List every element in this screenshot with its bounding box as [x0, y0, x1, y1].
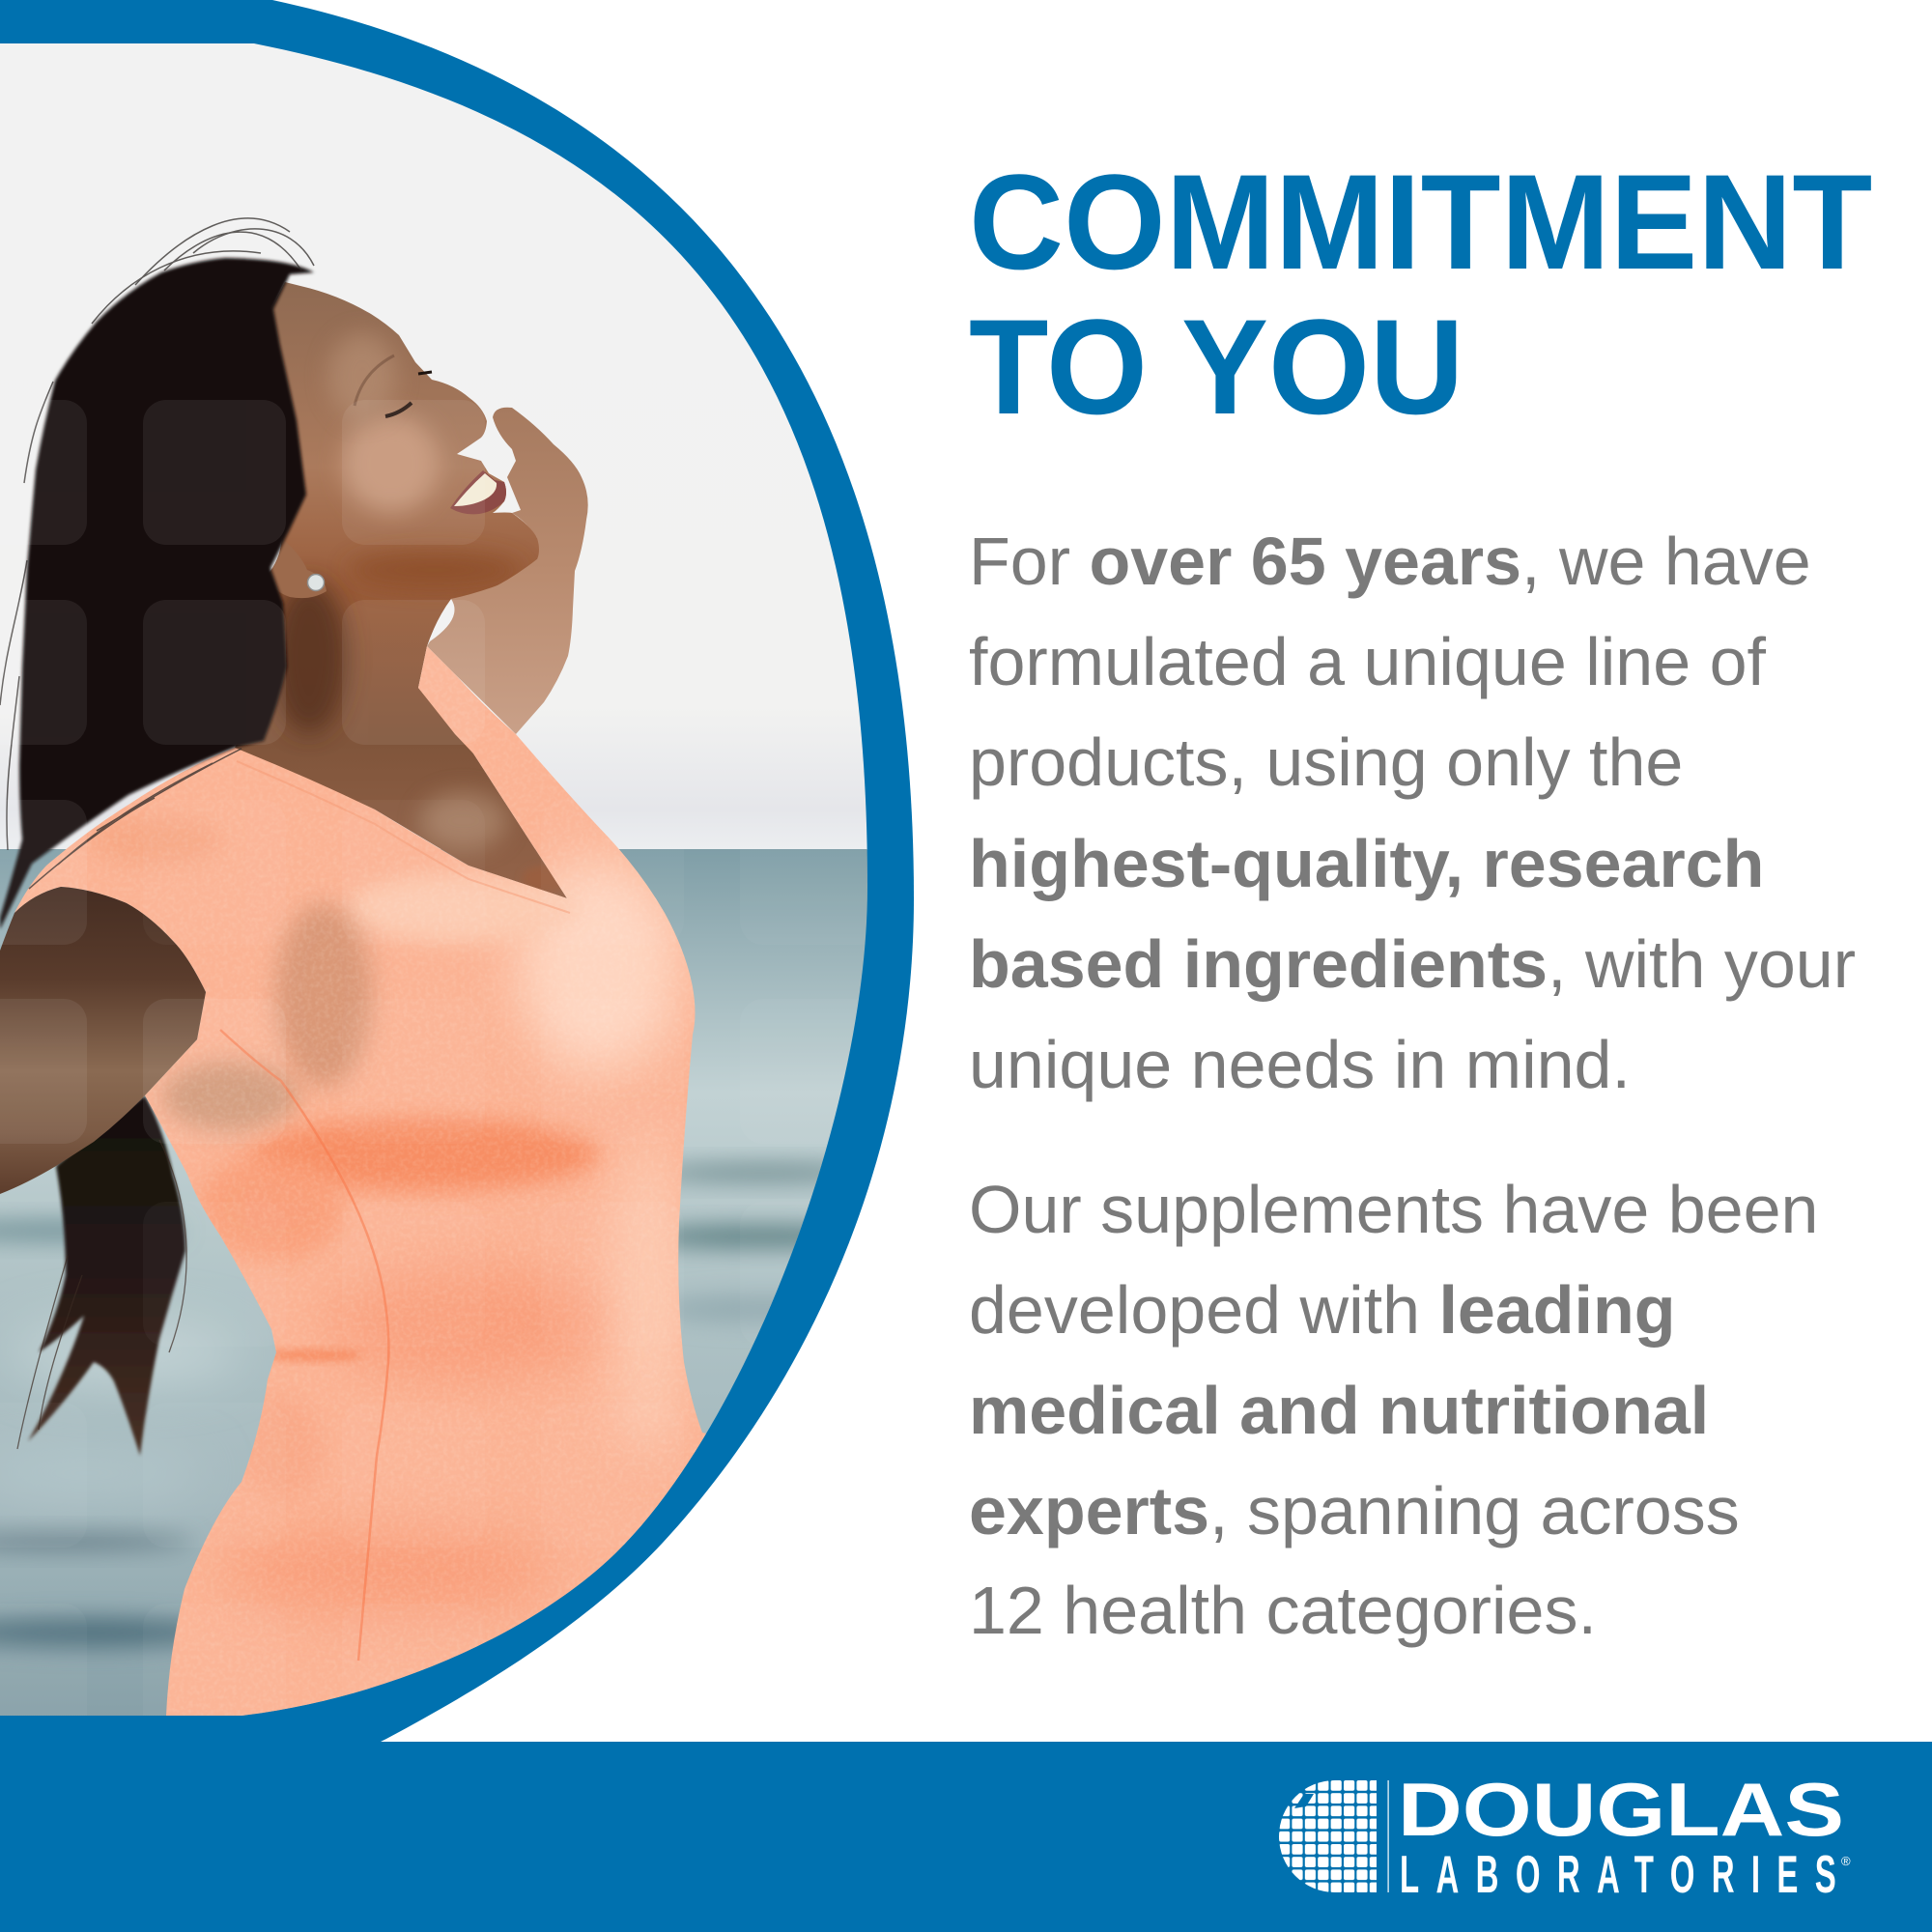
lower hair tail [28, 1095, 185, 1456]
paragraph 2: medical and nutritional [969, 1373, 1709, 1448]
paragraph 2: experts, spanning across [969, 1473, 1740, 1548]
ear [270, 546, 327, 599]
bottom blue band [0, 1742, 1932, 1932]
logo subline: LABORATORIES [1400, 1844, 1836, 1904]
logo mark: dot grid [1275, 1780, 1378, 1893]
paragraph 1: For over 65 years, we have [969, 524, 1811, 599]
skin shading [270, 333, 570, 893]
woman [0, 217, 706, 1716]
upper hair [0, 258, 314, 929]
paragraph 1 [969, 524, 1856, 1102]
paragraph 1: products, using only the [969, 724, 1683, 800]
overlay: fainter squares on shirt and sea [0, 800, 883, 1748]
logo: Douglas Laboratories [1279, 1780, 1851, 1893]
hair tail wisps [17, 1140, 186, 1449]
photo: woman by the sea [0, 43, 889, 1748]
face, neck and chest skin [235, 282, 567, 898]
shirt [14, 646, 773, 1716]
eyebrow [355, 355, 394, 406]
paragraph 2: 12 health categories. [969, 1573, 1597, 1648]
far arm and hand [427, 408, 588, 734]
collar hem [237, 761, 570, 913]
logo wordmark: DOUGLAS [1398, 1767, 1844, 1852]
title: COMMITMENT [969, 147, 1872, 298]
paragraph 2: Our supplements have been [969, 1172, 1818, 1247]
hair wisps [0, 218, 314, 889]
title [969, 147, 1872, 443]
paragraph 1: unique needs in mind. [969, 1027, 1631, 1102]
mouth [450, 470, 506, 514]
paragraph 1: highest-quality, research [969, 826, 1764, 901]
teeth [454, 473, 497, 506]
paragraph 2: developed with leading [969, 1272, 1675, 1348]
closed eye [385, 403, 412, 416]
paragraph 1: formulated a unique line of [969, 624, 1767, 699]
shirt seam [220, 1030, 388, 1661]
blue arc frame [0, 0, 914, 1744]
overlay: translucent rounded squares [0, 400, 485, 1144]
sky [0, 43, 869, 850]
logo divider [1387, 1780, 1389, 1892]
paragraph 2 [969, 1172, 1818, 1648]
registered mark: ® [1841, 1854, 1851, 1868]
sea [0, 849, 889, 1719]
front arm [0, 887, 206, 1194]
title: TO YOU [969, 293, 1463, 443]
shirt shading [0, 638, 773, 1719]
paragraph 1: based ingredients, with your [969, 926, 1856, 1002]
far eyelashes [418, 372, 432, 374]
earring [307, 574, 325, 591]
